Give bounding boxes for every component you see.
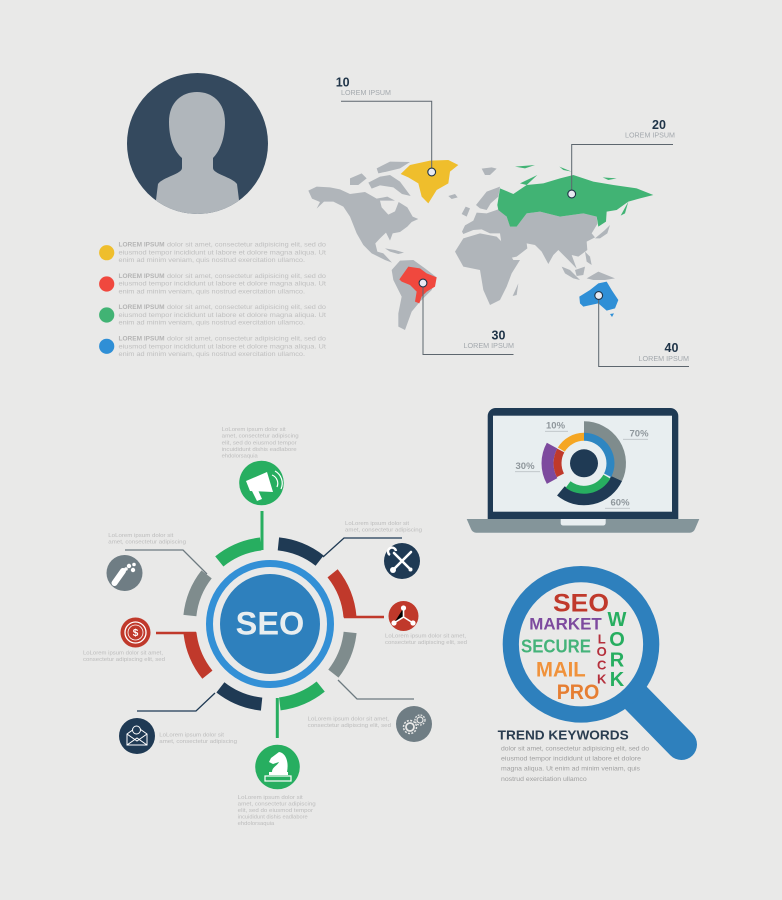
text: lower-right note: consectetur adipiscing elit, sed — [308, 723, 391, 729]
callout: 10: LOREM IPSUM — [341, 90, 391, 97]
text: bottom note: ehdolorsaquia — [238, 821, 275, 827]
legend item: red: eiusmod tempor incididunt ut labore et dolore magna aliqua. Ut — [118, 281, 326, 288]
legend item: yellow: LOREM IPSUM — [118, 242, 164, 249]
text: left note: LoLorem ipsum dolor sit amet, — [83, 651, 163, 657]
laptop body — [467, 408, 699, 533]
legend item: blue: enim ad minim veniam, quis nostrud exercitation ullamco. — [118, 351, 305, 358]
callout: 20 — [568, 118, 675, 198]
legend item: blue — [99, 336, 327, 358]
text: trend keywords body — [501, 746, 649, 783]
legend item: yellow — [99, 242, 327, 264]
callout: 10: 10 — [336, 76, 350, 90]
donut chart — [548, 427, 620, 499]
segment: top green with connector — [219, 511, 262, 561]
callout: 40: 40 — [664, 341, 678, 355]
SEO hub — [210, 564, 330, 684]
map: grey continents — [308, 162, 615, 330]
text: trend keywords body: magna aliqua. Ut enim ad minim veniam, quis — [501, 766, 641, 773]
callout: 40: LOREM IPSUM — [638, 356, 689, 363]
callout: 40 — [595, 292, 689, 366]
text: lower-left note: amet, consectetur adipiscing — [159, 739, 237, 745]
segment: left red with connector — [156, 633, 207, 675]
icon: network nodes — [388, 601, 418, 631]
legend item: red: dolor sit amet, consectetur adipisicing elit, sed do — [167, 273, 327, 280]
map: Russia — [497, 165, 653, 227]
text: top note: incuididunt dishis eadlabore — [222, 447, 297, 453]
legend item: blue: eiusmod tempor incididunt ut labore et dolore magna aliqua. Ut — [118, 343, 326, 350]
map: Australia — [579, 282, 618, 311]
chart label: 60%: 60% — [610, 498, 630, 508]
text: top note: LoLorem ipsum dolor sit — [222, 427, 286, 433]
icon: megaphone — [239, 461, 284, 505]
segment: bottom green with connector — [277, 687, 321, 738]
icon: envelope — [119, 718, 155, 754]
magnifier ring — [511, 574, 651, 714]
legend item: yellow: enim ad minim veniam, quis nostrud exercitation ullamco. — [118, 257, 305, 264]
callout: 30 — [419, 279, 514, 354]
icon: test tube — [106, 555, 142, 591]
legend item: green — [99, 304, 327, 326]
SEO hub: SEO — [236, 605, 304, 641]
keyword cloud: PRO — [557, 681, 599, 704]
keyword cloud: MAIL — [536, 659, 586, 682]
callout: 10 — [336, 76, 436, 176]
callout: 30: LOREM IPSUM — [464, 343, 514, 350]
text: bottom note: incuididunt dishis eadlabore — [238, 815, 308, 821]
heading: trend keywords: TREND KEYWORDS — [498, 727, 629, 742]
text: trend keywords body: eiusmod tempor incididunt ut labore et dolore — [501, 756, 641, 763]
world map — [308, 160, 653, 330]
icon: dollar target: $ — [133, 628, 139, 639]
legend item: yellow: dolor sit amet, consectetur adipisicing elit, sed do — [167, 242, 327, 249]
map: Brazil — [399, 267, 437, 303]
text: lower-left note: LoLorem ipsum dolor sit — [159, 732, 224, 738]
text: left note — [83, 651, 165, 663]
text: trend keywords body: dolor sit amet, consectetur adipisicing elit, sed do — [501, 746, 649, 753]
legend list — [99, 242, 327, 358]
text: upper-left note — [108, 533, 186, 546]
icon: user avatar — [127, 73, 268, 216]
text: upper-right note: LoLorem ipsum dolor sit — [345, 521, 409, 527]
callout: 20: LOREM IPSUM — [625, 133, 675, 140]
text: lower-right note: LoLorem ipsum dolor sit amet, — [308, 717, 389, 723]
keyword cloud: K — [597, 671, 607, 686]
chart label: 70%: 70% — [630, 429, 649, 440]
icon: dollar target — [120, 618, 150, 648]
text: top note — [222, 427, 299, 460]
legend item: blue: LOREM IPSUM — [118, 336, 164, 343]
text: right note: consectetur adipiscing elit, sed — [385, 640, 467, 646]
text: right note: LoLorem ipsum dolor sit amet, — [385, 634, 466, 640]
keyword cloud: W — [608, 609, 627, 631]
text: bottom note — [238, 795, 316, 827]
icon: gears — [396, 706, 432, 742]
text: lower-left note — [159, 732, 237, 745]
segment: right grey with connector — [333, 632, 414, 699]
text: bottom note: LoLorem ipsum dolor sit — [238, 795, 303, 801]
segment: top-right navy with connector — [278, 538, 402, 561]
text: upper-left note: LoLorem ipsum dolor sit — [108, 533, 174, 539]
text: right note — [385, 634, 467, 646]
laptop with donut chart — [467, 408, 699, 533]
legend item: green: dolor sit amet, consectetur adipisicing elit, sed do — [167, 304, 327, 311]
legend item: green: enim ad minim veniam, quis nostrud exercitation ullamco. — [118, 320, 305, 326]
legend item: red: enim ad minim veniam, quis nostrud exercitation ullamco. — [118, 288, 305, 295]
legend item: yellow: eiusmod tempor incididunt ut labore et dolore magna aliqua. Ut — [118, 249, 326, 256]
callout: 20: 20 — [652, 118, 666, 132]
segment: left grey with connector — [125, 550, 207, 616]
icon: chess knight — [255, 745, 300, 789]
text: upper-left note: amet, consectetur adipiscing — [108, 540, 186, 546]
chart label: 30%: 30% — [516, 461, 535, 472]
callout: 30: 30 — [492, 328, 505, 342]
text: top note: elit, sed do eiusmod tempor — [222, 440, 297, 446]
keyword cloud: O — [609, 629, 625, 651]
text: bottom note: amet, consectetur adipiscing — [238, 802, 316, 808]
keyword cloud: L — [598, 631, 606, 646]
legend item: green: LOREM IPSUM — [118, 304, 164, 311]
keyword cloud — [521, 590, 627, 704]
legend item: blue: dolor sit amet, consectetur adipisicing elit, sed do — [167, 336, 327, 343]
keyword cloud: C — [597, 657, 607, 672]
text: top note: amet, consectetur adipiscing — [222, 434, 299, 440]
keyword cloud: MARKET — [529, 615, 602, 633]
keyword cloud: R — [610, 650, 625, 672]
segment: right red with connector — [333, 573, 384, 617]
text: trend keywords body: nostrud exercitation ullamco — [501, 776, 587, 783]
text: top note: ehdolorsaquia — [222, 454, 259, 460]
icon: wrench and screwdriver — [384, 543, 420, 579]
map: Greenland — [401, 160, 458, 203]
legend item: red: LOREM IPSUM — [118, 273, 164, 280]
segment: bottom-left navy with connector — [137, 687, 262, 711]
text: bottom note: elit, sed do eiusmod tempor — [238, 808, 313, 814]
text: upper-right note: amet, consectetur adipiscing — [345, 528, 422, 534]
SEO radial diagram — [83, 427, 467, 827]
keyword cloud: O — [597, 644, 607, 659]
text: lower-right note — [308, 717, 391, 729]
legend item: red — [99, 273, 327, 295]
text: upper-right note — [345, 521, 422, 534]
keyword cloud: SECURE — [521, 637, 591, 657]
text: left note: consectetur adipiscing elit, sed — [83, 657, 165, 663]
legend item: green: eiusmod tempor incididunt ut labore et dolore magna aliqua. Ut — [118, 312, 326, 319]
keyword cloud: K — [610, 669, 625, 691]
keyword cloud: SEO — [553, 590, 609, 618]
chart label: 10%: 10% — [546, 420, 566, 432]
magnifying glass with keywords — [511, 574, 682, 744]
magnifier handle — [636, 698, 682, 744]
